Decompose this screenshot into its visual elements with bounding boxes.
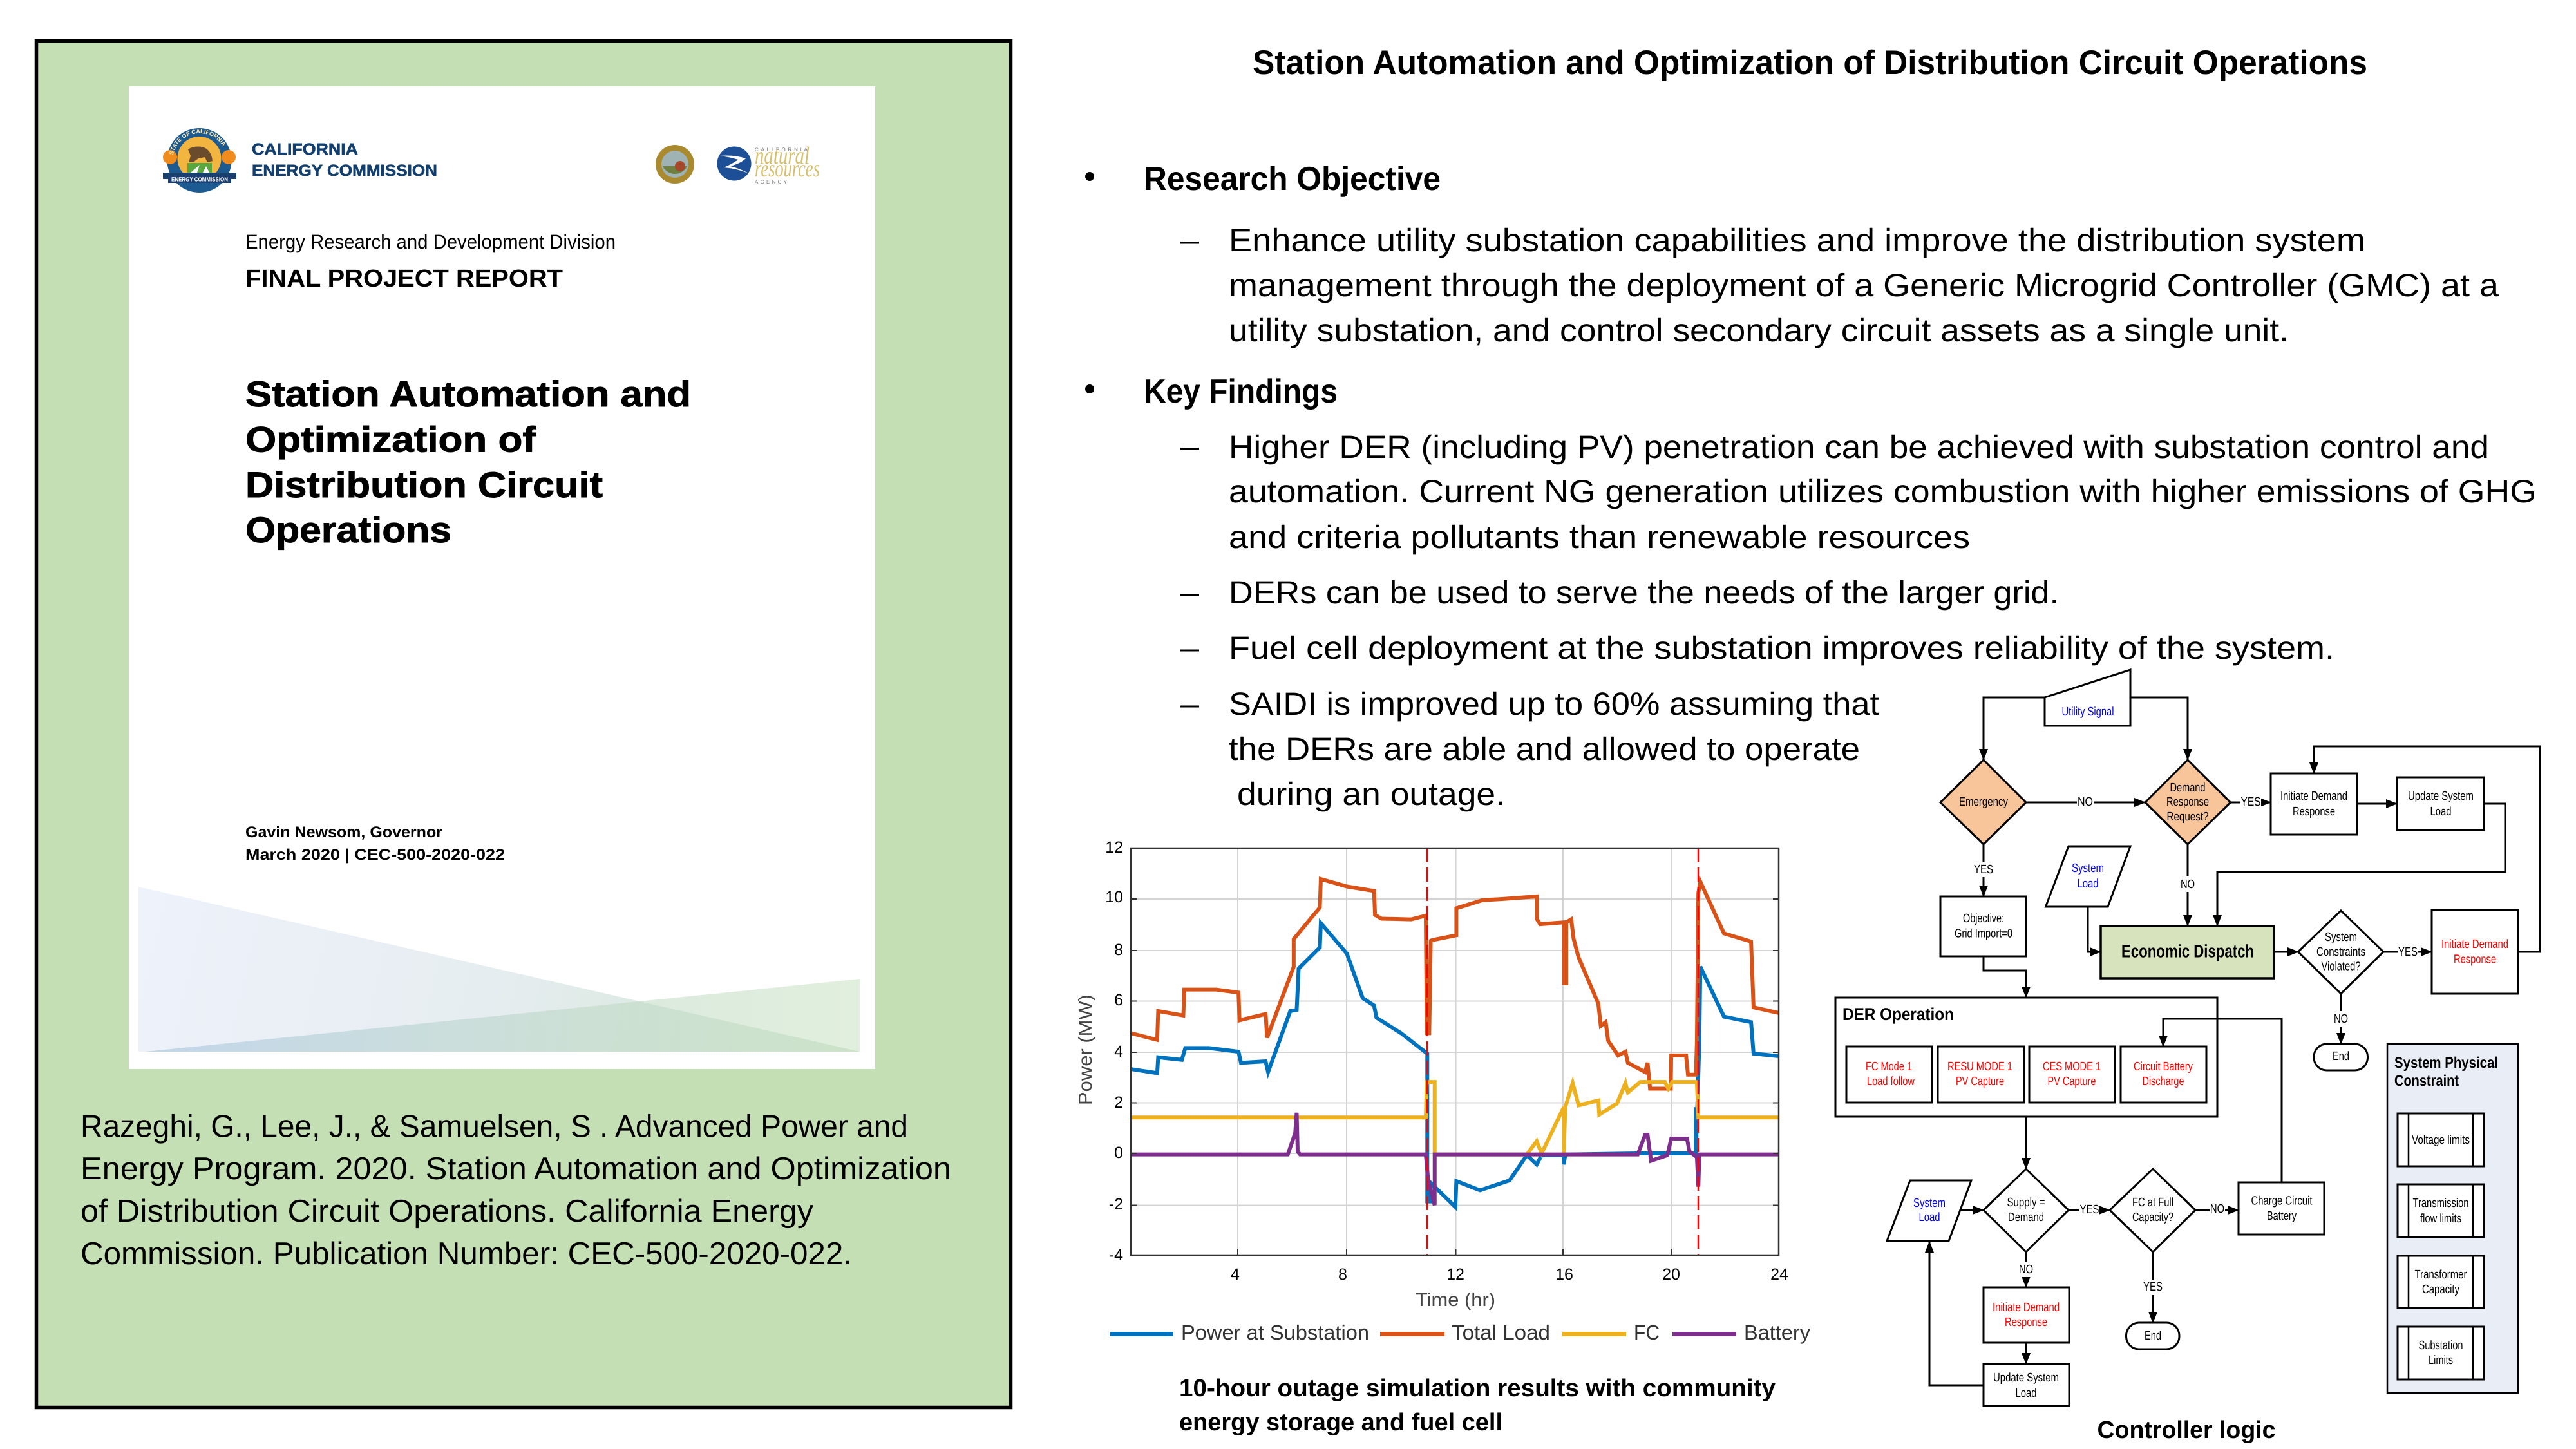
node: economic dispatch: Economic Dispatch: [2121, 942, 2254, 961]
label: no: NO: [2181, 878, 2195, 891]
decision: demand response request: Demand: [2170, 781, 2205, 795]
label: yes: YES: [2143, 1280, 2163, 1294]
logo: California Energy Commission: STATE OF CALIFORNIA: [169, 129, 225, 155]
chart legend: Total Load: [1452, 1321, 1550, 1344]
label: yes: YES: [2398, 945, 2418, 959]
node: initiate demand response red: Response: [2454, 953, 2496, 966]
decision: supply equals demand: Supply =: [2007, 1196, 2045, 1209]
cover: report title: Distribution Circuit: [245, 464, 603, 505]
logo: California Natural Resources Agency: natural: [755, 142, 810, 169]
node: initiate demand response red: Initiate Demand: [2441, 938, 2508, 951]
flowchart: controller logic: [1835, 670, 2540, 1406]
text block: key findings: during an outage.: [1237, 776, 1505, 812]
x axis title: Time (hr): [1416, 1290, 1495, 1311]
text block: research objective: Enhance utility substation capabilities and improve the distribution system: [1229, 222, 2365, 258]
node: initiate demand response: Response: [2293, 805, 2335, 819]
chart x axis labels: 4: [1231, 1265, 1240, 1283]
node: initiate demand response lower: Initiate Demand: [1993, 1301, 2060, 1314]
logo: state seal: [656, 145, 694, 184]
text block: key findings: and criteria pollutants than renewable resources: [1229, 519, 1970, 555]
text block: research objective: management through the deployment of a Generic Microgrid Controller (GMC) at a: [1229, 267, 2499, 303]
node: initiate demand response: Initiate Demand: [2280, 790, 2347, 803]
logo: California Energy Commission: CALIFORNIA: [252, 140, 358, 158]
decision: emergency: Emergency: [1959, 795, 2008, 809]
chart y axis labels: 0: [1114, 1144, 1123, 1162]
cover: report title: [245, 374, 691, 550]
text block: key findings: Key Findings: [1144, 373, 1338, 410]
mode: CES mode 1: [2029, 1046, 2115, 1103]
label: no: NO: [2019, 1263, 2033, 1276]
node: charge circuit battery: Battery: [2267, 1209, 2297, 1223]
chart x axis labels: 8: [1338, 1265, 1347, 1283]
label: no: [2018, 1262, 2034, 1277]
cover: report title: Optimization of: [245, 419, 536, 460]
cover: governor and date: [245, 824, 505, 864]
decision: demand response request: Response: [2166, 795, 2209, 809]
constraint: voltage limits: Voltage limits: [2412, 1133, 2470, 1147]
label: yes: YES: [2080, 1203, 2099, 1217]
chart x axis labels: 12: [1446, 1265, 1464, 1283]
flowchart connectors: [1929, 697, 2540, 1385]
citation text: of Distribution Circuit Operations. California Energy: [80, 1194, 814, 1229]
citation text: [80, 1109, 951, 1271]
flowchart caption: Controller logic: [2097, 1417, 2276, 1444]
chart y axis labels: 4: [1114, 1043, 1123, 1061]
constraint: substation limits: Substation: [2419, 1339, 2463, 1352]
chart y axis labels: [1105, 838, 1123, 1264]
chart y axis labels: 2: [1114, 1094, 1123, 1112]
decision: supply equals demand: [1984, 1169, 2069, 1252]
decision: emergency: [1940, 760, 2026, 844]
input: system load: [2045, 846, 2130, 907]
decision: fuel cell at full capacity: FC at Full: [2132, 1196, 2174, 1209]
chart y axis labels: -4: [1109, 1246, 1123, 1264]
mode: CES mode 1: CES MODE 1: [2043, 1060, 2101, 1074]
mode: circuit battery discharge: [2121, 1046, 2206, 1103]
decision: demand response request: Request?: [2166, 810, 2209, 824]
chart y axis labels: 6: [1114, 991, 1123, 1009]
logo: California Natural Resources Agency: [717, 142, 820, 185]
panel: report cover and citation: [35, 39, 1012, 1409]
chart: outage simulation line chart: [1075, 838, 1810, 1344]
node: economic dispatch: [2101, 926, 2274, 978]
node: initiate demand response lower: [1984, 1287, 2069, 1343]
cover: gradient triangles: [138, 887, 860, 1052]
outage start and end markers: [1427, 848, 1698, 1255]
input: system load lower: [1887, 1180, 1971, 1241]
trace: fuel cell: [1131, 1082, 1779, 1155]
cover: report type: FINAL PROJECT REPORT: [245, 265, 563, 292]
text block: key findings: automation. Current NG generation utilizes combustion with higher emissions of GHG: [1229, 473, 2537, 509]
chart y axis labels: -2: [1109, 1195, 1123, 1213]
node: charge circuit battery: Charge Circuit: [2251, 1194, 2313, 1208]
mode: circuit battery discharge: Discharge: [2142, 1075, 2184, 1088]
label: no: [2210, 1201, 2225, 1217]
mode: RESU mode 1: PV Capture: [1956, 1075, 2004, 1088]
logo: California Natural Resources Agency: CALIFORNIA: [755, 147, 808, 153]
label: no: [2180, 876, 2195, 892]
cover: report title: Operations: [245, 509, 451, 550]
node: update system load lower: Load: [2016, 1387, 2036, 1400]
citation text: Energy Program. 2020. Station Automation and Optimization: [80, 1151, 951, 1186]
logo: California Natural Resources Agency: AGENCY: [755, 179, 788, 185]
text block: research objective: [1085, 160, 2499, 348]
cover: governor and date: Gavin Newsom, Governor: [245, 824, 442, 841]
input: system load: System: [2072, 862, 2104, 875]
mode: FC mode 1: [1846, 1046, 1932, 1103]
logo: California Energy Commission: [163, 128, 437, 193]
logo: California Energy Commission: ENERGY COMMISSION: [252, 162, 437, 180]
main title: Station Automation and Optimization of Distribution Circuit Operations: [1253, 44, 2367, 82]
decision: supply equals demand: Demand: [2008, 1211, 2044, 1224]
node: objective: Objective:: [1963, 912, 2004, 925]
panel: DER operation: DER Operation: [1842, 1005, 1954, 1024]
node: update system load: Load: [2430, 805, 2451, 819]
decision: demand response request: [2145, 760, 2231, 844]
chart caption: [1179, 1375, 1776, 1436]
node: update system load lower: [1984, 1364, 2069, 1406]
trace: power at substation: [1131, 923, 1779, 1207]
constraint: transmission flow limits: Transmission: [2412, 1197, 2469, 1210]
chart x axis labels: 20: [1662, 1265, 1680, 1283]
decision: fuel cell at full capacity: Capacity?: [2132, 1211, 2174, 1224]
terminator: end: End: [2333, 1050, 2349, 1063]
chart legend: Power at Substation: [1181, 1321, 1369, 1344]
node: initiate demand response lower: Response: [2005, 1316, 2047, 1329]
node: utility signal: [2045, 670, 2130, 726]
label: no: NO: [2334, 1012, 2348, 1026]
decision: system constraints violated: System: [2325, 931, 2357, 944]
chart caption: 10-hour outage simulation results with community: [1179, 1375, 1776, 1402]
chart legend: [1110, 1321, 1810, 1344]
logo: California Natural Resources Agency: resources: [755, 155, 820, 182]
chart y axis labels: 8: [1114, 941, 1123, 959]
chart x axis labels: 24: [1770, 1265, 1788, 1283]
chart x axis labels: 16: [1555, 1265, 1573, 1283]
text block: key findings: DERs can be used to serve the needs of the larger grid.: [1229, 574, 2059, 611]
text block: key findings: [1085, 373, 2537, 812]
node: utility signal: Utility Signal: [2062, 705, 2114, 719]
mode: FC mode 1: Load follow: [1867, 1075, 1915, 1088]
terminator: end lower: End: [2145, 1329, 2161, 1343]
mode: RESU mode 1: RESU MODE 1: [1947, 1060, 2012, 1074]
trace: battery: [1131, 1113, 1779, 1205]
constraint: transmission flow limits: flow limits: [2420, 1212, 2461, 1226]
label: yes: [2079, 1202, 2099, 1217]
label: no: [2333, 1011, 2349, 1027]
panel: system physical constraint: System Physical: [2394, 1054, 2498, 1072]
constraint: transformer capacity: Transformer: [2415, 1268, 2467, 1282]
node: update system load lower: Update System: [1993, 1371, 2059, 1385]
panel: DER operation: [1835, 998, 2217, 1117]
cover: report title: Station Automation and: [245, 374, 691, 414]
decision: system constraints violated: Violated?: [2321, 960, 2361, 974]
mode: FC mode 1: FC Mode 1: [1866, 1060, 1912, 1074]
text block: key findings: SAIDI is improved up to 60% assuming that: [1229, 686, 1879, 722]
panel: system physical constraint: [2387, 1044, 2518, 1393]
constraint: substation limits: [2398, 1327, 2484, 1379]
terminator: end: [2314, 1044, 2367, 1070]
cover: division line: Energy Research and Development Division: [245, 231, 616, 253]
chart legend: Battery: [1744, 1321, 1810, 1344]
label: yes: YES: [1974, 863, 1993, 876]
mode: CES mode 1: PV Capture: [2048, 1075, 2096, 1088]
citation text: Commission. Publication Number: CEC-500-2020-022.: [80, 1236, 852, 1271]
chart y axis labels: 10: [1105, 888, 1123, 906]
connector: charge to discharge: [2163, 1019, 2282, 1182]
report cover page: [129, 86, 875, 1069]
text block: key findings: Higher DER (including PV) penetration can be achieved with substation control and: [1229, 429, 2489, 465]
label: no: NO: [2078, 795, 2093, 809]
node: initiate demand response: [2271, 773, 2357, 835]
constraint: voltage limits: [2398, 1113, 2484, 1166]
y axis title: Power (MW): [1075, 994, 1096, 1105]
node: objective: Grid Import=0: [1955, 927, 2012, 940]
cover: governor and date: March 2020 | CEC-500-2020-022: [245, 846, 505, 864]
constraint: transmission flow limits: [2398, 1184, 2484, 1237]
decision: fuel cell at full capacity: [2110, 1169, 2195, 1252]
constraint: substation limits: Limits: [2429, 1354, 2453, 1367]
constraint: transformer capacity: [2398, 1256, 2484, 1308]
input: system load lower: Load: [1919, 1211, 1940, 1224]
chart legend: FC: [1634, 1321, 1660, 1344]
label: no: NO: [2210, 1202, 2224, 1216]
input: system load lower: System: [1913, 1197, 1946, 1210]
text block: research objective: utility substation, and control secondary circuit assets as a single unit.: [1229, 312, 2289, 348]
node: update system load: Update System: [2408, 790, 2474, 803]
mode: RESU mode 1: [1938, 1046, 2023, 1103]
decision: system constraints violated: [2298, 911, 2383, 994]
panel: system physical constraint: Constraint: [2394, 1072, 2459, 1090]
node: charge circuit battery: [2239, 1182, 2324, 1235]
logo: California Energy Commission: ENERGY COMMISSION: [171, 176, 228, 183]
text block: key findings: Fuel cell deployment at the substation improves reliability of the system.: [1229, 630, 2334, 666]
chart plot area: [1131, 848, 1779, 1255]
decision: system constraints violated: Constraints: [2316, 945, 2365, 959]
node: initiate demand response red: [2432, 910, 2518, 994]
text block: research objective: Research Objective: [1144, 160, 1441, 198]
citation text: Razeghi, G., Lee, J., & Samuelsen, S . Advanced Power and: [80, 1109, 908, 1144]
text block: key findings: the DERs are able and allowed to operate: [1229, 731, 1860, 767]
chart x axis labels: [1231, 1265, 1788, 1283]
node: objective: [1940, 896, 2026, 956]
node: update system load: [2397, 777, 2484, 830]
trace: total load: [1131, 879, 1779, 1088]
input: system load: Load: [2078, 877, 2098, 891]
mode: circuit battery discharge: Circuit Battery: [2134, 1060, 2193, 1074]
terminator: end lower: [2126, 1323, 2179, 1349]
chart y axis labels: 12: [1105, 838, 1123, 857]
constraint: transformer capacity: Capacity: [2422, 1283, 2459, 1296]
label: yes: YES: [2241, 795, 2260, 809]
chart caption: energy storage and fuel cell: [1179, 1409, 1502, 1436]
